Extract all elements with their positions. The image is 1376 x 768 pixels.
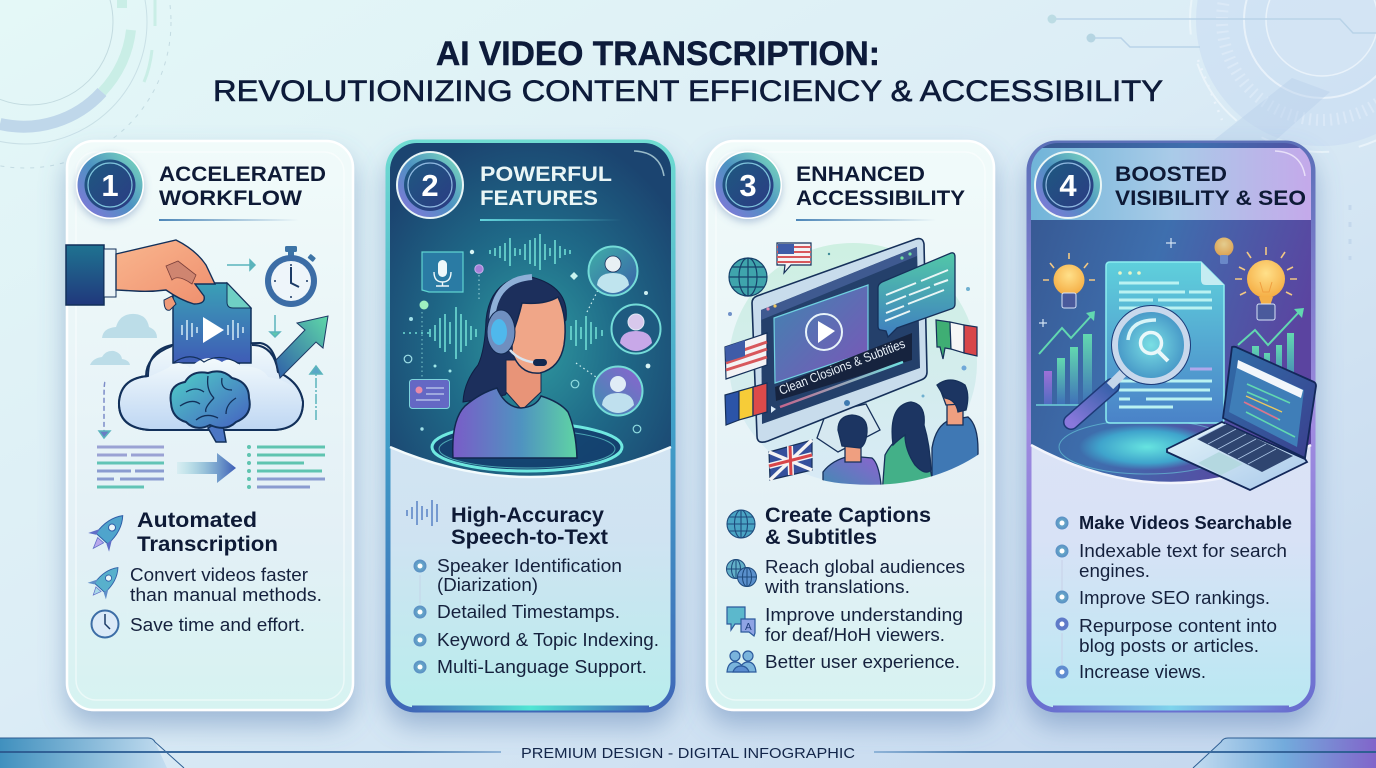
panel 3: enhanced accessibility [707, 141, 994, 710]
small clouds [90, 314, 157, 365]
text: better experience: Better user experience. [765, 652, 960, 672]
text: reach global: Reach global audiences [765, 557, 965, 577]
monitor [752, 239, 927, 442]
panel 1: accelerated workflow [66, 141, 353, 710]
viewers [823, 380, 978, 495]
icon: translate bubbles: A [745, 622, 752, 633]
icon: translate bubbles [727, 607, 755, 636]
badge 1 [76, 151, 144, 219]
neck [506, 360, 541, 410]
icon: waveform [407, 500, 437, 526]
illustration: document, magnifier, charts, laptop [1036, 238, 1316, 490]
suit sleeve [66, 245, 104, 305]
badge 4: 4 [1059, 168, 1077, 203]
top light bulb [1214, 238, 1234, 264]
shirt cuff [104, 249, 116, 297]
viewer left [823, 415, 882, 495]
subheading 2: High-Accuracy [451, 504, 604, 527]
left bar chart [1036, 311, 1100, 405]
brain [171, 371, 250, 442]
panel 4: boosted visibility and SEO [1028, 141, 1316, 710]
heading 4 [1115, 162, 1306, 210]
decoration: top left concentric rings [0, 0, 171, 168]
heading 3 [796, 162, 965, 221]
video frame [774, 285, 868, 383]
sound waves [403, 234, 602, 359]
text: convert videos: than manual methods. [130, 585, 322, 605]
text: reach global: with translations. [764, 577, 910, 597]
feature list [1056, 513, 1292, 682]
face [512, 297, 565, 373]
text: save time: Save time and effort. [130, 615, 305, 635]
subheading 3 [765, 504, 931, 549]
sparkles [1039, 238, 1176, 327]
heading 3: ACCESSIBILITY [796, 186, 965, 210]
icon: two globes [726, 560, 756, 586]
subheading 3: & Subtitles [765, 526, 877, 549]
text: reach global [764, 557, 965, 597]
footer text: PREMIUM DESIGN - DIGITAL INFOGRAPHIC [521, 745, 855, 762]
heading 1 [159, 162, 326, 221]
left light bulb [1043, 253, 1095, 308]
woman with headset [453, 276, 577, 458]
icon: clock [92, 610, 118, 638]
heading 3: ENHANCED [796, 162, 925, 186]
text: convert videos: Convert videos faster [130, 565, 308, 585]
subheading 2: Speech-to-Text [451, 526, 608, 549]
shirt [453, 388, 577, 458]
badge 3 [714, 151, 782, 219]
footer decoration right [1193, 738, 1376, 768]
badge 2 [396, 151, 464, 219]
decoration: top right tech dial and circuit lines [1048, 0, 1376, 260]
video file [173, 283, 251, 363]
flag: USA speech bubble [777, 243, 811, 273]
icon: small rocket [84, 559, 127, 603]
progress bar [780, 362, 903, 407]
feature list: Detailed Timestamps. [437, 602, 620, 622]
flow arrows [99, 260, 322, 438]
right bar chart [1238, 308, 1304, 393]
conversion arrow [177, 453, 236, 483]
glowing document [1106, 262, 1224, 423]
illustration: hand, video file, cloud brain [66, 240, 328, 489]
text lines right [247, 445, 325, 489]
feature list: (Diarization) [437, 575, 538, 595]
feature list [414, 556, 659, 677]
globe [729, 258, 767, 296]
icon: globe [727, 510, 755, 538]
flag: USA [725, 333, 767, 379]
right light bulb [1235, 247, 1297, 320]
feature list: Increase views. [1079, 662, 1206, 682]
title line 1: AI VIDEO TRANSCRIPTION: [436, 35, 880, 73]
monitor stand [817, 404, 880, 452]
stopwatch [265, 246, 317, 307]
avatar 1 [588, 246, 638, 296]
badge 4 [1034, 151, 1102, 219]
dark illustration area [1028, 141, 1316, 501]
back cloud [119, 343, 303, 430]
feature list: blog posts or articles. [1079, 636, 1259, 656]
feature list: Improve SEO rankings. [1079, 588, 1270, 608]
mic box [422, 252, 463, 292]
icon: people [727, 651, 756, 672]
dark illustration area [387, 141, 675, 491]
panel 2: powerful features [387, 141, 675, 710]
text: improve understanding [765, 605, 963, 645]
front cloud lobe [120, 358, 302, 429]
laptop [1167, 347, 1316, 490]
avatar 2 [612, 304, 660, 354]
platform ring [432, 423, 622, 471]
viewer middle [882, 401, 932, 484]
feature list: Keyword & Topic Indexing. [437, 630, 659, 650]
caption chip [410, 380, 450, 408]
growth arrow [276, 316, 328, 378]
icon: rocket [83, 506, 133, 558]
feature list: Repurpose content into [1079, 616, 1277, 636]
sparkles and nodes [404, 250, 650, 433]
title line 2: REVOLUTIONIZING CONTENT EFFICIENCY & ACCESSIBILITY [213, 75, 1163, 108]
feature list: Multi-Language Support. [437, 657, 647, 677]
feature list: Indexable text for search [1079, 541, 1287, 561]
flag: UK [769, 440, 812, 480]
heading 2 [480, 166, 612, 221]
text lines left [97, 447, 164, 487]
hair [463, 276, 566, 402]
heading 4: VISIBILITY & SEO [1115, 186, 1306, 210]
viewer right [931, 379, 979, 476]
caption bar: Clean Closions & Subtities [777, 336, 908, 398]
title [213, 35, 1163, 108]
heading 2: FEATURES [480, 186, 598, 210]
footer decoration left [0, 738, 184, 768]
caption speech bubble [878, 253, 955, 337]
flag: tricolor [725, 383, 767, 425]
heading 1: ACCELERATED [159, 162, 326, 186]
subheading 2 [451, 504, 608, 549]
text: improve understanding: for deaf/HoH viewers. [765, 625, 945, 645]
avatar 3 [594, 366, 642, 416]
badge 2: 2 [421, 168, 439, 203]
magnifier [1071, 306, 1190, 422]
feature list: engines. [1079, 561, 1150, 581]
subheading 3: Create Captions [765, 504, 931, 527]
hand [116, 240, 215, 310]
text: improve understanding: Improve understanding [765, 605, 963, 625]
curved divider [1031, 445, 1311, 483]
play button [806, 314, 842, 350]
heading 2: POWERFUL [480, 162, 612, 186]
curved divider [390, 447, 671, 477]
feature list: Make Videos Searchable [1079, 513, 1292, 533]
text: convert videos [130, 565, 322, 605]
feature list: Speaker Identification [437, 556, 622, 576]
subheading 1: Automated [137, 509, 257, 532]
subheading 1 [137, 509, 278, 556]
illustration: monitor with captions, flags and viewers [725, 239, 978, 495]
heading 1: WORKFLOW [159, 186, 303, 210]
flag: Italy [936, 320, 977, 359]
badge 3: 3 [739, 168, 757, 203]
subheading 1: Transcription [137, 533, 278, 556]
heading 4: BOOSTED [1115, 162, 1227, 186]
badge 1: 1 [101, 168, 119, 203]
